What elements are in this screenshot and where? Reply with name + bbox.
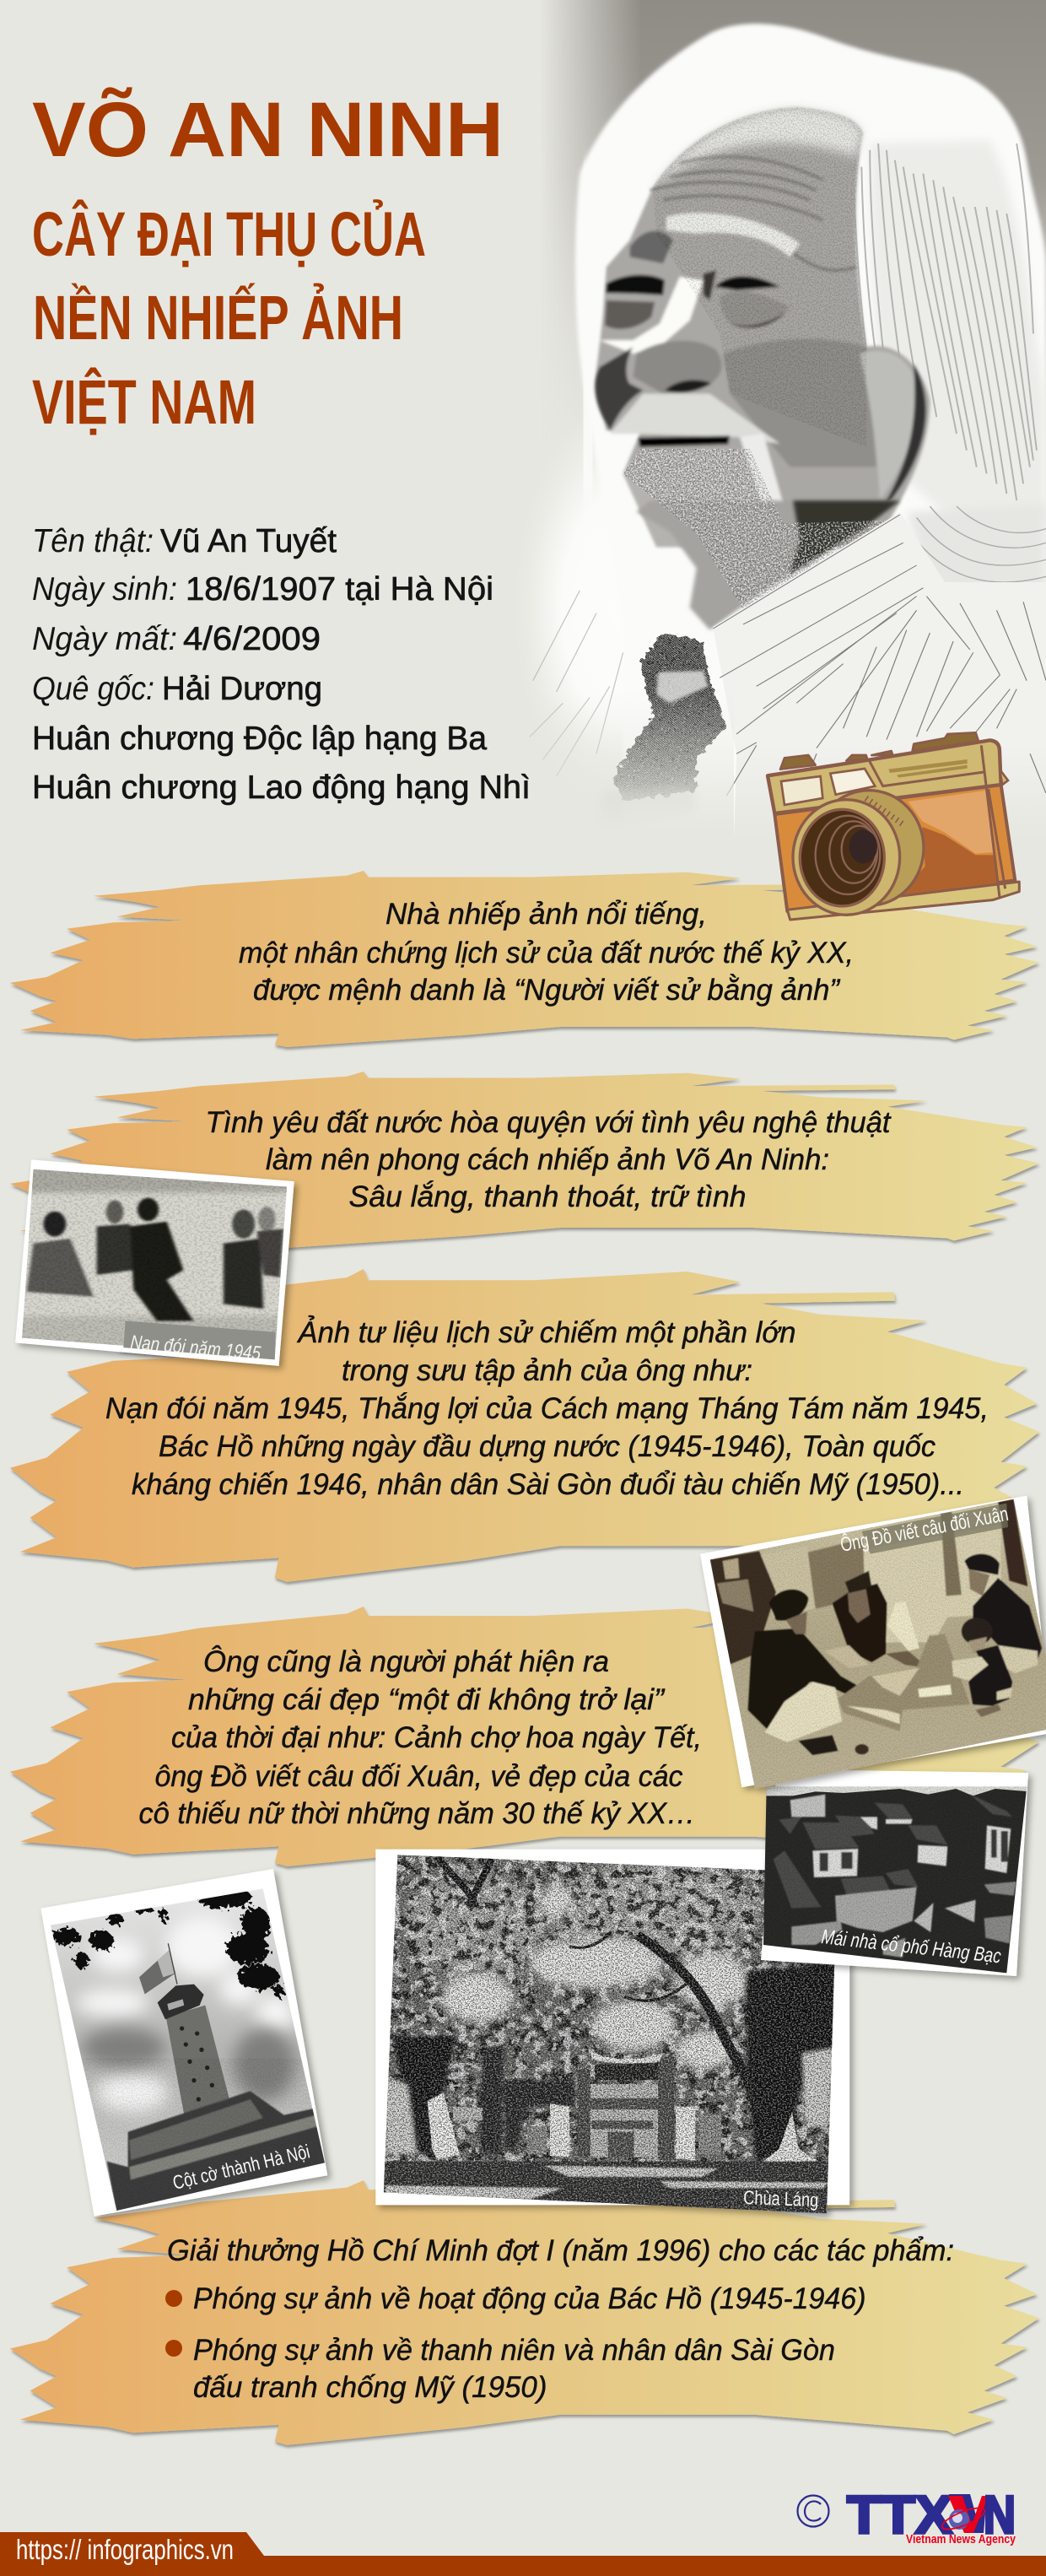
panel: Ho Chi Minh prize: Phóng sự ảnh về hoạt động của Bác Hồ (1945-1946)	[193, 2282, 865, 2315]
panel: vanished beauty: của thời đại như: Cảnh chợ hoa ngày Tết,	[171, 1721, 702, 1754]
subtitle line 3: VIỆT NAM	[32, 367, 256, 437]
biography facts: Ngày sinh:	[32, 571, 177, 608]
face	[595, 107, 930, 547]
panel: historical photographs: trong sưu tập ảnh của ông như:	[342, 1354, 752, 1387]
biography facts: Quê gốc:	[32, 671, 154, 707]
long hair lower	[907, 504, 1046, 608]
panel: artistic style	[10, 1072, 1039, 1248]
biography facts: Huân chương Độc lập hạng Ba	[32, 721, 487, 757]
panel: famous photographer: một nhân chứng lịch sử của đất nước thế kỷ XX,	[239, 937, 854, 969]
agency name: Vietnam News Agency	[906, 2532, 1016, 2546]
bullet 2	[165, 2340, 182, 2357]
photo: famine 1945	[13, 1158, 300, 1367]
copyright mark	[798, 2496, 828, 2526]
panel: vanished beauty: cô thiếu nữ thời những năm 30 thế kỷ XX…	[138, 1797, 695, 1830]
biography facts: Tên thật:	[32, 523, 154, 559]
photo: Lang pagoda	[375, 1850, 849, 2217]
panel: vanished beauty: ông Đồ viết câu đối Xuân, vẻ đẹp của các	[155, 1760, 683, 1793]
panel: vanished beauty: những cái đẹp “một đi không trở lại”	[188, 1683, 665, 1716]
soft white halo left of the face	[515, 405, 725, 810]
panel: famous photographer: được mệnh danh là “Người viết sử bằng ảnh”	[253, 974, 840, 1007]
TTXVN wordmark	[847, 2486, 1016, 2545]
photo: calligrapher writing Tet couplets	[692, 1485, 1046, 1795]
TTXVN wordmark: TTX	[847, 2486, 952, 2545]
soft fade into page background	[523, 692, 734, 844]
biography facts	[32, 523, 531, 806]
ground	[382, 2162, 834, 2217]
subtitle line 1: CÂY ĐẠI THỤ CỦA	[32, 199, 426, 269]
tower	[166, 2006, 229, 2115]
panel: famous photographer: Nhà nhiếp ảnh nổi tiếng,	[386, 898, 707, 931]
biography facts: 18/6/1907 tại Hà Nội	[186, 571, 493, 608]
photo: flag tower of Hanoi	[40, 1869, 329, 2217]
nose and cheeks	[633, 341, 722, 394]
panel: historical photographs: Nạn đói năm 1945, Thắng lợi của Cách mạng Tháng Tám năm 1945,	[105, 1392, 989, 1425]
subtitle line 2: NỀN NHIẾP ẢNH	[33, 283, 403, 353]
biography facts: Vũ An Tuyết	[160, 523, 337, 559]
panel: Ho Chi Minh prize: Phóng sự ảnh về thanh niên và nhân dân Sài Gòn	[193, 2334, 835, 2367]
striped shirt	[713, 512, 1046, 840]
fortress base	[107, 2091, 326, 2213]
footer band	[0, 2532, 1046, 2576]
photo: famine 1945: Nạn đói năm 1945	[130, 1331, 262, 1364]
caption: Cột cờ thành Hà Nội	[170, 2140, 312, 2194]
biography facts: Hải Dương	[162, 671, 322, 707]
white hair mass	[575, 24, 1046, 834]
bullet 1	[165, 2290, 182, 2307]
biography facts: Ngày mất:	[32, 621, 177, 657]
gate	[590, 2084, 658, 2157]
logo: copyright and TTXVN	[798, 2486, 1016, 2546]
patterned tie	[600, 633, 726, 835]
photo: old roofs of Hang Bac street	[759, 1769, 1029, 1977]
portrait photo of Võ An Ninh	[506, 0, 1046, 844]
caption strip	[123, 1320, 276, 1359]
flag	[139, 1951, 175, 1994]
panel: historical photographs: Ảnh tư liệu lịch sử chiếm một phần lớn	[297, 1315, 796, 1349]
panel: artistic style: làm nên phong cách nhiếp ảnh Võ An Ninh:	[266, 1143, 829, 1176]
panel: vanished beauty: Ông cũng là người phát hiện ra	[203, 1645, 609, 1678]
beard	[636, 500, 900, 630]
panel: artistic style: Tình yêu đất nước hòa quyện với tình yêu nghệ thuật	[206, 1106, 892, 1139]
TTXVN wordmark: N	[984, 2486, 1016, 2545]
panel: Ho Chi Minh prize: đấu tranh chống Mỹ (1950)	[193, 2371, 547, 2404]
title	[32, 86, 504, 437]
panel: historical photographs: kháng chiến 1946, nhân dân Sài Gòn đuổi tàu chiến Mỹ (1950)...	[132, 1468, 964, 1501]
caption: Chùa Láng	[743, 2186, 819, 2211]
panel: famous photographer	[10, 871, 1039, 1047]
globe	[940, 2503, 987, 2534]
caption strip	[862, 1504, 1008, 1554]
heading: name: VÕ AN NINH	[32, 86, 504, 173]
panel: vanished beauty	[10, 1607, 1039, 1866]
biography facts: Huân chương Lao động hạng Nhì	[32, 770, 531, 806]
source url: https:// infographics.vn	[16, 2534, 234, 2565]
moustache and mouth	[610, 394, 779, 444]
panel: historical photographs	[10, 1269, 1039, 1582]
icon: camera	[768, 732, 1019, 920]
panel: Ho Chi Minh prize	[10, 2180, 1039, 2445]
panel: Ho Chi Minh prize: Giải thưởng Hồ Chí Minh đợt I (năm 1996) cho các tác phẩm:	[167, 2234, 954, 2267]
eyes	[606, 275, 665, 295]
trunks and roots	[428, 2093, 460, 2160]
biography facts: 4/6/2009	[183, 621, 321, 657]
panel: artistic style: Sâu lắng, thanh thoát, trữ tình	[349, 1180, 746, 1213]
panel: historical photographs: Bác Hồ những ngày đầu dựng nước (1945-1946), Toàn quốc	[159, 1430, 935, 1463]
